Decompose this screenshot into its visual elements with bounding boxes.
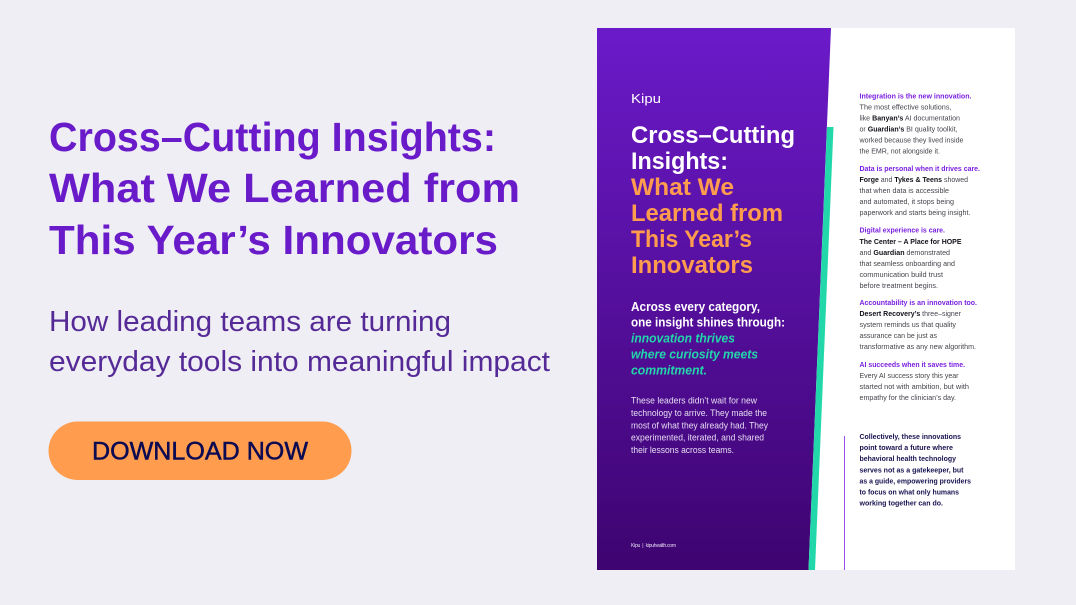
subheading: How leading teams are turning [49, 306, 451, 338]
insight: accountability: assurance can be just as [860, 331, 937, 340]
insight: integration: The most effective solutions, [860, 102, 952, 112]
insight: digital experience: before treatment begins. [860, 281, 938, 290]
cover title [631, 122, 795, 279]
heading: This Year’s Innovators [49, 217, 498, 263]
insight: AI: started not with ambition, but with [860, 382, 969, 391]
teal slanted accent bar [808, 127, 834, 570]
cover body text: technology to arrive. They made the [631, 408, 767, 419]
heading [49, 114, 520, 263]
cover key insight: innovation thrives [631, 330, 735, 346]
cover title: Innovators [631, 252, 753, 279]
insight: accountability: transformative as any new algorithm. [860, 342, 976, 351]
cover key insight [631, 299, 785, 378]
closing divider line [844, 436, 845, 570]
insight: accountability [860, 298, 977, 351]
cover title: What We [631, 174, 734, 201]
cover title: Learned from [631, 200, 783, 227]
closing statement [859, 432, 971, 508]
insight: AI: Every AI success story this year [860, 371, 959, 380]
insight: integration: worked because they lived inside [859, 136, 964, 144]
insight: AI: empathy for the clinician’s day. [860, 393, 956, 402]
insight: accountability: system reminds us that quality [860, 320, 956, 329]
insight: data: paperwork and starts being insight. [860, 208, 970, 217]
insight: integration: the EMR, not alongside it. [860, 146, 940, 156]
closing statement: serves not as a gatekeeper, but [860, 466, 964, 474]
cover body text: experimented, iterated, and shared [631, 432, 764, 444]
insight: data: Forge and Tykes & Teens showed [860, 175, 968, 184]
insight: AI [860, 360, 969, 402]
closing statement: point toward a future where [860, 443, 953, 452]
logo: Kipu: Kipu [631, 91, 661, 106]
heading: What We Learned from [49, 165, 520, 211]
cover footer: Kipu | kipuhealth.com [631, 543, 676, 549]
cover key insight: Across every category, [631, 299, 760, 314]
insight: digital experience: and Guardian demonstrated [860, 248, 950, 257]
cover body text: These leaders didn’t wait for new [631, 396, 757, 406]
cover key insight: where curiosity meets [631, 346, 758, 362]
closing statement: as a guide, empowering providers [860, 476, 971, 486]
cover key insight: one insight shines through: [631, 314, 785, 330]
cover key insight: commitment. [631, 362, 707, 378]
insight: data: and automated, it stops being [860, 197, 954, 206]
insight: accountability: Accountability is an innovation too. [860, 298, 977, 307]
insight: data [860, 164, 980, 217]
page background [597, 28, 1015, 570]
cover body text: most of what they already had. They [631, 420, 768, 432]
cover body text: their lessons across teams. [631, 445, 734, 456]
insight: accountability: Desert Recovery’s three–signer [860, 309, 961, 318]
closing statement: behavioral health technology [860, 454, 957, 463]
cover title: Cross–Cutting [631, 122, 795, 149]
insight: digital experience: communication build trust [860, 270, 944, 279]
closing statement: Collectively, these innovations [860, 432, 961, 441]
insight: data: that when data is accessible [860, 186, 949, 195]
insight: digital experience: The Center – A Place for HOPE [860, 237, 962, 246]
download button: DOWNLOAD NOW [92, 438, 308, 466]
document preview [597, 28, 1015, 570]
insight: data: Data is personal when it drives care. [860, 164, 980, 173]
download button [48, 422, 352, 480]
cover title: Insights: [631, 148, 728, 175]
insight: digital experience: Digital experience is care. [860, 226, 945, 234]
insight: digital experience [860, 226, 962, 290]
insight: integration: like Banyan’s AI documentation [860, 114, 960, 122]
insight: integration: Integration is the new innovation. [860, 92, 972, 100]
insight: integration [859, 92, 972, 156]
cover title: This Year’s [631, 226, 752, 253]
insight: digital experience: that seamless onboarding and [860, 259, 955, 268]
insight: integration: or Guardian’s BI quality toolkit, [860, 124, 958, 134]
insight: AI: AI succeeds when it saves time. [860, 360, 965, 369]
cover body text [631, 396, 768, 456]
closing statement: to focus on what only humans [860, 488, 959, 496]
closing statement: working together can do. [859, 498, 943, 508]
purple cover panel [597, 28, 831, 570]
subheading [49, 306, 550, 378]
heading: Cross–Cutting Insights: [49, 114, 496, 160]
subheading: everyday tools into meaningful impact [49, 346, 550, 378]
